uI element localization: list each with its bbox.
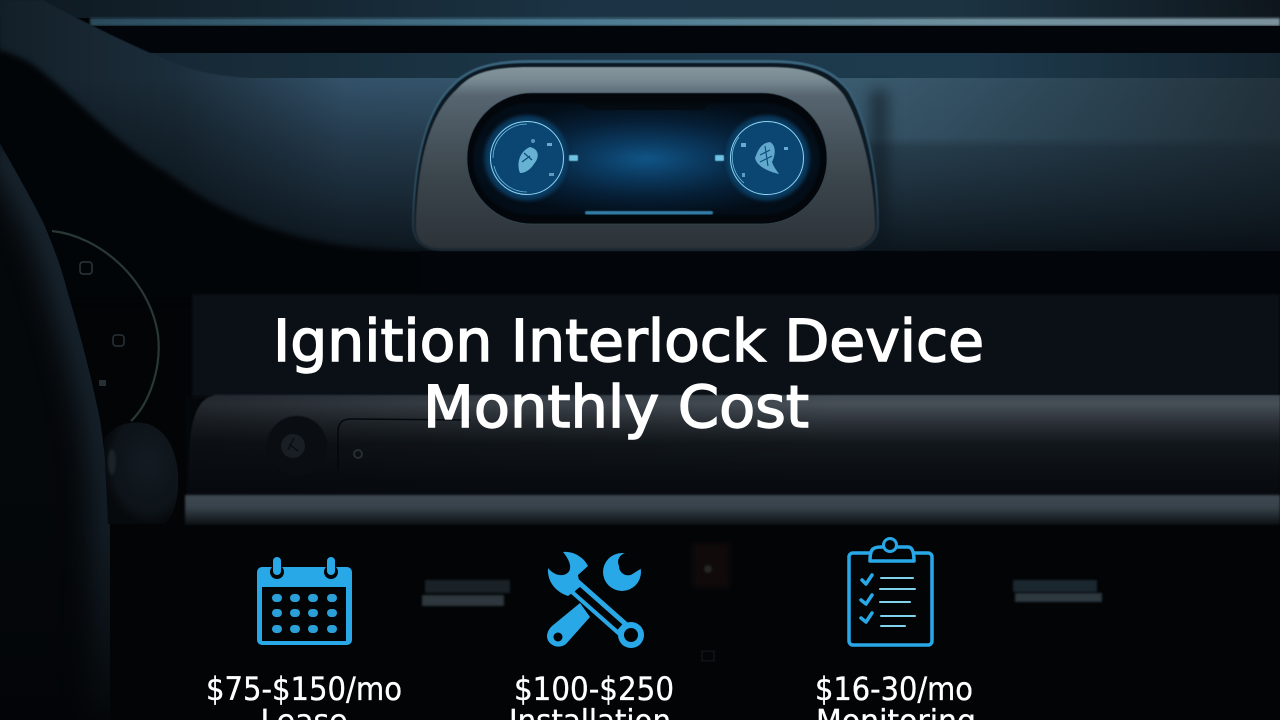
background: band below dashboard [420,251,1280,293]
price: lease: $75-$150/mo [206,670,402,708]
column: lease [206,557,402,720]
panel button [338,419,470,470]
icon: wrench and spanner [547,545,652,648]
instrument gauge [52,231,159,421]
screen display [473,103,820,215]
title: Monthly Cost [423,373,809,441]
screen bezel [467,93,827,224]
panel knob [267,416,327,476]
screen indicator bar [585,211,713,214]
wheel stalk [104,423,178,524]
air vents and lower console [422,543,1102,661]
device housing [412,60,879,251]
background: lower dash panel [185,395,1280,525]
left dial [481,112,578,204]
right dial [715,112,813,204]
background: middle dash panel [192,294,1280,398]
title [273,307,984,441]
background: dark area under dash curve [0,48,440,300]
column: monitoring [815,538,976,720]
price: monitoring: $16-30/mo [815,670,973,708]
icon: calendar [257,557,352,645]
title: Ignition Interlock Device [273,307,984,375]
icon: clipboard checklist [849,538,932,645]
price: installation: $100-$250 [514,670,674,708]
steering wheel [0,140,178,720]
column: installation [509,545,674,720]
